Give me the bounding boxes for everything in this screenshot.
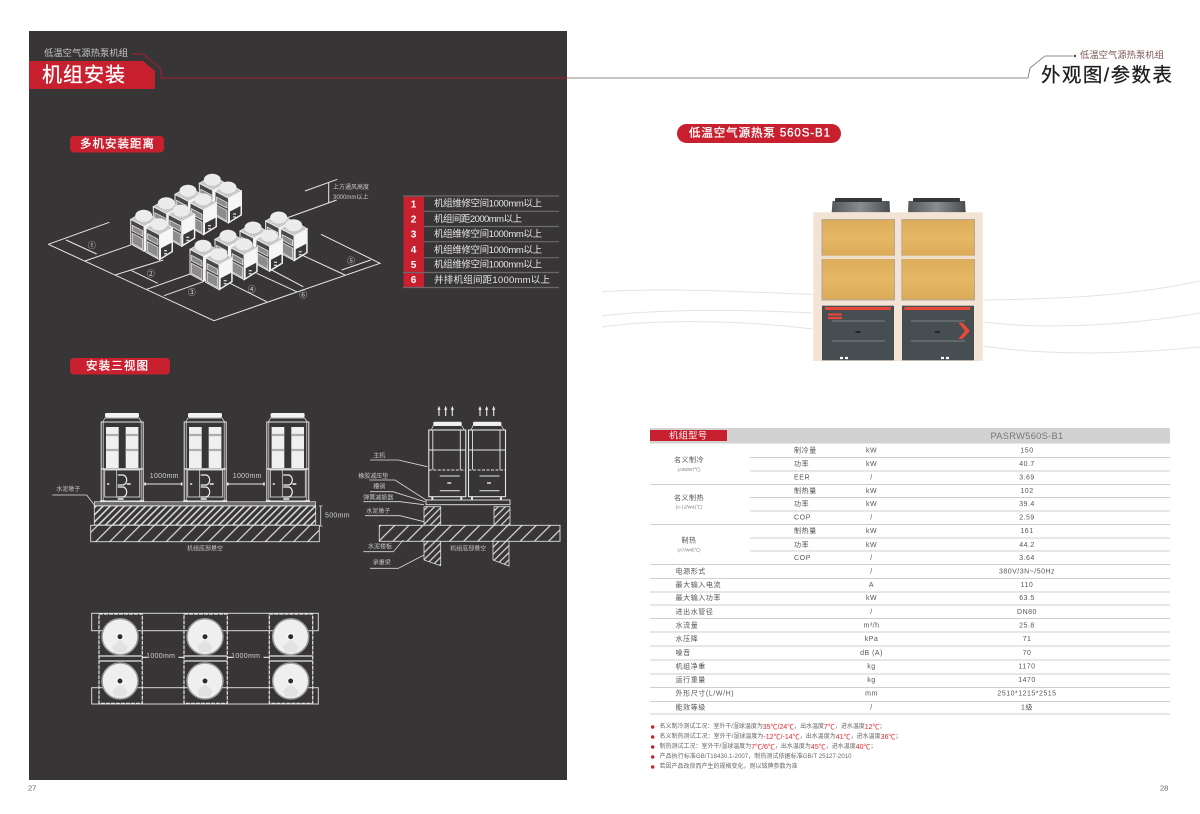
general spec rows: 噪音 [676,648,691,657]
diagram: side view: 水泥墩子 [366,507,390,515]
diagram: side view: 水泥楼板 [368,542,392,550]
diagram: top view: 1000mm [231,653,260,660]
notes list: 名义制冷测试工况：室外干/湿球温度为35℃/24℃，出水温度7℃，进水温度12℃； [660,722,886,730]
general spec rows: 2510*1215*2515 [997,690,1057,698]
group: 名义制热: (A-12/W41℃) [676,504,703,510]
group: 名义制热: kW [866,501,877,508]
diagram: side view: 槽钢 [373,483,385,491]
diagram: side view: 主机 [373,452,385,460]
general spec rows: 进出水管径 [676,607,714,616]
general spec rows: 1470 [1018,677,1036,684]
right header subtitle: 低温空气源热泵机组 [1080,49,1164,60]
general spec rows: kPa [865,636,878,643]
group: 制热: 制热量 [794,526,817,535]
left header subtitle: 低温空气源热泵机组 [44,47,128,58]
group: 名义制冷: 功率 [794,459,809,468]
general spec rows: 1级 [1021,702,1033,712]
table header: 机组型号 [669,430,707,441]
left header tab: 机组安装 [29,61,155,89]
diagram: side view: 承重梁 [373,558,391,566]
group: 名义制冷: 40.7 [1019,461,1035,468]
group: 名义制冷: EER [794,474,810,482]
diagram: side view [358,407,560,568]
general spec rows: 水压降 [676,634,698,643]
diagram: isometric multi-unit layout: 3000mm以上 [333,193,368,201]
group: 名义制冷: 制冷量 [794,446,817,454]
page number right: 28 [1160,784,1168,792]
general spec rows: 25.8 [1019,622,1035,630]
diagram: front view: 水泥墩子 [56,485,80,493]
general spec rows: 1170 [1018,664,1036,670]
general spec rows: 63.5 [1019,595,1035,602]
section pill: 多机安装距离: 多机安装距离 [80,136,154,150]
diagram: front view: 1000mm [233,473,262,480]
top fans [832,198,966,212]
diagram: isometric multi-unit layout: ⑤ [347,256,355,266]
general spec rows: m³/h [864,622,880,630]
group: 制热: (A7/W45℃) [678,548,701,552]
row 4: 机组维修空间1000mm以上 [434,244,542,256]
row 3: 3 [411,230,417,240]
row 5: 机组维修空间1000mm以上 [434,258,542,270]
general spec rows: kW [866,595,877,602]
general spec rows: 外形尺寸(L/W/H) [676,688,734,698]
group: 制热: / [870,555,873,562]
general spec rows: / [870,609,873,616]
general spec rows: / [870,568,873,576]
diagram: front view: 1000mm [150,473,179,480]
row 1: 1 [411,200,417,210]
product title pill: 低温空气源热泵 560S-B1 [689,126,830,140]
group: 名义制热: / [870,514,873,522]
diagram: isometric multi-unit layout: ④ [248,285,256,294]
notes list: 若因产品改良而产生的规格变化，则以铭牌参数为准 [660,762,798,770]
general spec rows: 70 [1023,650,1031,657]
general spec rows: 水流量 [676,620,698,630]
group: 名义制冷 [674,446,1035,482]
group: 名义制冷: 150 [1020,448,1034,454]
diagram: isometric multi-unit layout: ① [88,241,96,250]
diagram: side view: 机组底部悬空 [450,545,486,553]
group: 名义制热: 39.4 [1019,501,1035,508]
group: 制热: kW [866,542,877,549]
product title pill [677,124,841,143]
group: 制热: COP [794,555,811,562]
group: 制热 [678,526,1035,562]
section pill: 安装三视图 [70,358,170,374]
spec table [650,428,1170,714]
general spec rows: 机组净重 [676,662,706,670]
general spec rows: 运行重量 [676,675,706,684]
group: 制热: 161 [1020,528,1034,535]
general spec rows: / [870,704,873,712]
general spec rows: 71 [1023,636,1031,643]
section pill: 安装三视图: 安装三视图 [86,358,148,372]
diagram: isometric multi-unit layout: 上方通风高度 [333,183,369,191]
row 2: 机组间距2000mm以上 [434,213,522,225]
general spec rows: 110 [1021,582,1033,589]
group: 名义制冷: / [870,474,873,482]
row 5: 5 [411,260,417,271]
table header [650,428,1170,444]
group: 名义制热: 制热量 [794,486,817,495]
row 3: 机组维修空间1000mm以上 [434,228,542,240]
notes list: 名义制热测试工况：室外干/湿球温度为-12℃/-14℃，出水温度为41℃，进水温度36℃； [660,732,902,740]
product image: heat pump unit [813,198,983,361]
diagram: isometric multi-unit layout: ② [147,270,155,278]
general spec rows: mm [865,690,878,698]
general spec rows: 最大输入功率 [676,593,721,602]
row 6: 6 [411,275,417,286]
group: 制热: 44.2 [1019,542,1035,549]
diagram: side view: 橡胶减压垫 [358,472,388,480]
notes list: 产品执行标准GB/T18430.1-2007，制热测试依据标准GB/T 25127-2010 [660,752,852,760]
diagram: front view: 机组底部悬空 [187,544,223,552]
diagram: front view: 500mm [325,512,350,520]
general spec rows: kg [867,664,876,670]
diagram: top view: 1000mm [146,653,175,660]
group: 名义制热: 功率 [794,499,809,508]
diagram: isometric multi-unit layout [48,174,380,321]
general spec rows: 电源形式 [676,566,706,576]
diagram: side view: 弹簧减振器 [363,494,393,502]
group: 制热: 功率 [794,540,809,549]
diagram: isometric multi-unit layout: ⑥ [299,290,307,300]
row 2 [411,213,522,226]
group: 名义制热: kW [866,488,877,495]
group: 名义制热 [674,486,1035,522]
background: right page curves [602,281,1200,353]
general spec rows: 能效等级 [676,702,706,712]
group: 名义制热: 2.59 [1019,514,1035,522]
group: 名义制热: 名义制热 [674,493,704,502]
general spec rows [676,566,1057,712]
lower dark panels [822,306,974,360]
group: 名义制热: COP [794,514,811,522]
group: 名义制冷: kW [866,448,877,454]
row 4: 4 [411,245,417,256]
group: 制热: 3.64 [1019,555,1035,562]
right header title: 外观图/参数表: 外观图/参数表 [1041,64,1172,86]
group: 名义制冷: (A35/W7℃) [678,467,701,472]
general spec rows: 最大输入电流 [676,580,721,589]
group: 名义制冷: 名义制冷 [674,455,704,464]
page number left: 27 [28,784,36,792]
connector line across header [132,54,1076,78]
notes list [651,722,902,770]
row 6: 并排机组间距1000mm以上 [434,274,550,286]
section pill: 多机安装距离 [70,136,164,152]
group: 名义制热: 102 [1020,488,1034,495]
row 1: 机组维修空间1000mm以上 [434,198,542,210]
general spec rows: 380V/3N~/50Hz [999,568,1055,576]
general spec rows: DN80 [1017,609,1037,616]
diagram: front view [52,413,350,552]
group: 制热: kW [866,528,877,535]
group: 名义制冷: kW [866,461,877,468]
panel: installation dark page [29,31,567,780]
requirements list table [403,196,559,288]
table header: PASRW560S-B1 [990,431,1064,441]
row 1 [411,198,542,210]
group: 制热: 制热 [682,536,696,544]
notes list: 制热测试工况：室外干/湿球温度为7℃/6℃，出水温度为45℃，进水温度40℃； [660,742,876,750]
diagram: top view [92,613,318,704]
general spec rows: A [869,582,874,589]
diagram: isometric multi-unit layout: ③ [188,288,196,297]
left header tab: 机组安装: 机组安装 [42,64,125,86]
general spec rows: dB (A) [860,650,883,657]
row 2: 2 [411,214,417,226]
gold filter panels [822,219,975,300]
group: 名义制冷: 3.69 [1019,474,1035,482]
general spec rows: kg [867,677,876,684]
